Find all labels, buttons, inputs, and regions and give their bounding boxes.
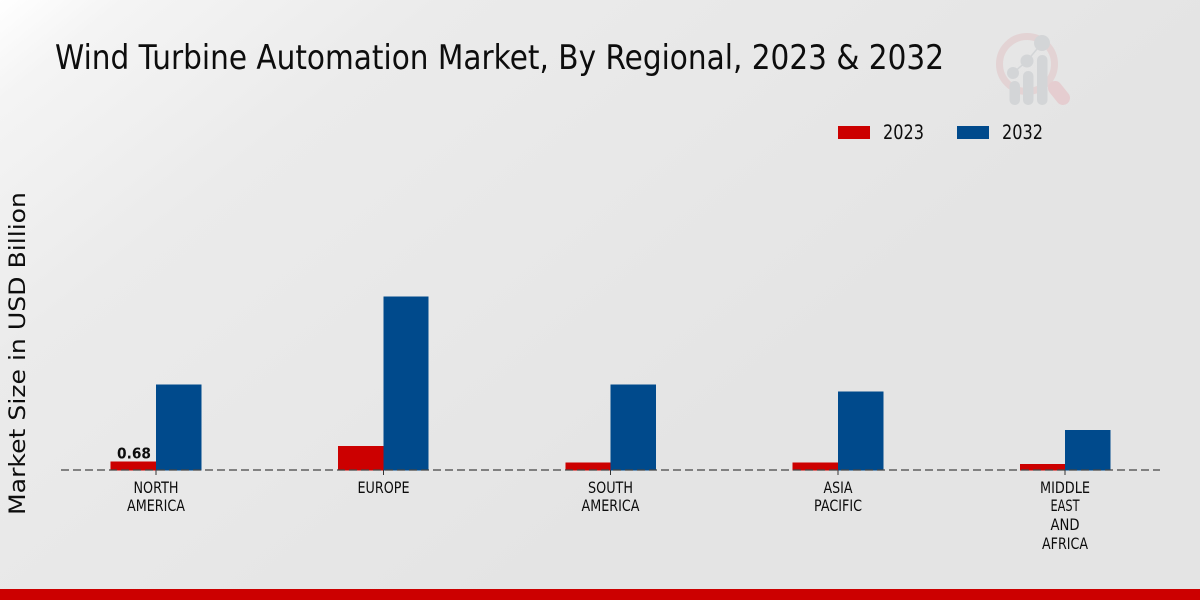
legend xyxy=(838,121,1043,144)
label: Middle East and Africa: EAST xyxy=(1050,496,1080,515)
legend item: 2023: 2023 xyxy=(883,121,924,144)
bars: South America xyxy=(566,384,656,470)
label: North America: NORTH xyxy=(134,478,178,497)
bar chart xyxy=(110,296,1110,470)
label: South America: AMERICA xyxy=(582,496,640,515)
title: Wind Turbine Automation Market, By Regional, 2023 & 2032 xyxy=(55,38,944,78)
legend item: 2032: 2032 xyxy=(1002,121,1043,144)
label: Middle East and Africa xyxy=(1040,478,1090,553)
label: South America: SOUTH xyxy=(588,478,633,497)
label: Asia Pacific xyxy=(814,478,862,515)
label: Europe: EUROPE xyxy=(358,478,410,497)
footer bar xyxy=(0,589,1200,600)
legend item: 2032 xyxy=(957,121,1043,144)
bars: Europe xyxy=(338,296,428,470)
label: North America xyxy=(127,478,185,515)
label: North America: AMERICA xyxy=(127,496,185,515)
label: Asia Pacific: ASIA xyxy=(824,478,853,497)
legend item: 2023 xyxy=(838,121,924,144)
bars: North America xyxy=(110,384,202,470)
label: South America xyxy=(582,478,640,515)
y-axis title: Market Size in USD Billion xyxy=(5,192,31,515)
bars: Middle East and Africa xyxy=(1020,430,1110,470)
icon: magnifier logo watermark xyxy=(1000,35,1063,105)
label: Middle East and Africa: AND xyxy=(1050,515,1080,534)
label: Middle East and Africa: AFRICA xyxy=(1042,534,1088,553)
label: Middle East and Africa: MIDDLE xyxy=(1040,478,1090,497)
label: Asia Pacific: PACIFIC xyxy=(814,496,862,515)
bars: Asia Pacific xyxy=(792,392,884,470)
x-axis labels xyxy=(127,478,1090,553)
value label: 0.68: 0.68 xyxy=(117,444,151,462)
x-axis baseline xyxy=(61,470,1160,475)
